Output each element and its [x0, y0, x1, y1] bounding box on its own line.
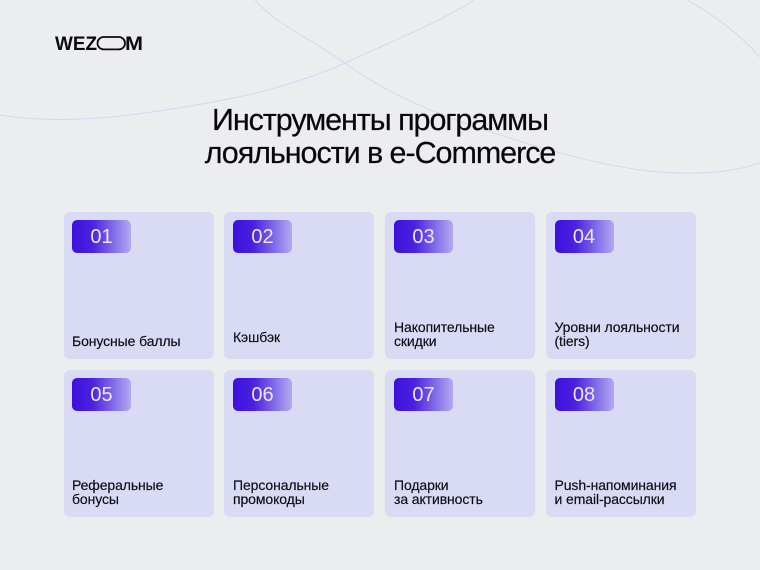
panel: card 05: Реферальные	[72, 477, 163, 493]
panel: card 08: Push-напоминания	[554, 477, 676, 493]
panel: card 06: промокоды	[233, 490, 305, 506]
panel: card 02: Кэшбэк	[233, 329, 280, 345]
panel: card 04	[546, 212, 696, 359]
panel: card 03	[385, 212, 535, 359]
panel: card 07: Подарки	[394, 477, 449, 493]
panel: card 06: 06	[251, 384, 274, 406]
panel: card 01	[64, 212, 214, 359]
panel: card 01: Бонусные баллы	[72, 333, 181, 349]
panel: card 01: 01	[90, 226, 113, 248]
panel: card 05: бонусы	[72, 490, 119, 506]
panel: card 06	[224, 370, 374, 517]
panel: card 07: за активность	[394, 490, 483, 506]
logo: WEZOM	[55, 34, 143, 52]
panel: card 06: Персональные	[233, 477, 329, 493]
panel: card 04: Уровни лояльности	[554, 319, 679, 335]
panel: card 02	[224, 212, 374, 359]
title	[204, 103, 556, 170]
panel: card 08: и email-рассылки	[554, 490, 664, 506]
panel: card 03: скидки	[394, 332, 436, 348]
panel: card 08	[546, 370, 696, 517]
panel: card 04: (tiers)	[554, 332, 590, 348]
panel: card 07	[385, 370, 535, 517]
panel: card 03: Накопительные	[394, 319, 495, 335]
title: лояльности в e-Commerce	[205, 136, 555, 170]
panel: card 04: 04	[573, 226, 595, 248]
panel: card 05: 05	[90, 384, 113, 406]
panel: card 05	[64, 370, 214, 517]
panel: card 07: 07	[412, 384, 435, 406]
title: Инструменты программы	[212, 103, 548, 137]
panel: card 03: 03	[412, 226, 435, 248]
panel: card 02: 02	[251, 226, 274, 248]
panel: card 08: 08	[573, 384, 595, 406]
